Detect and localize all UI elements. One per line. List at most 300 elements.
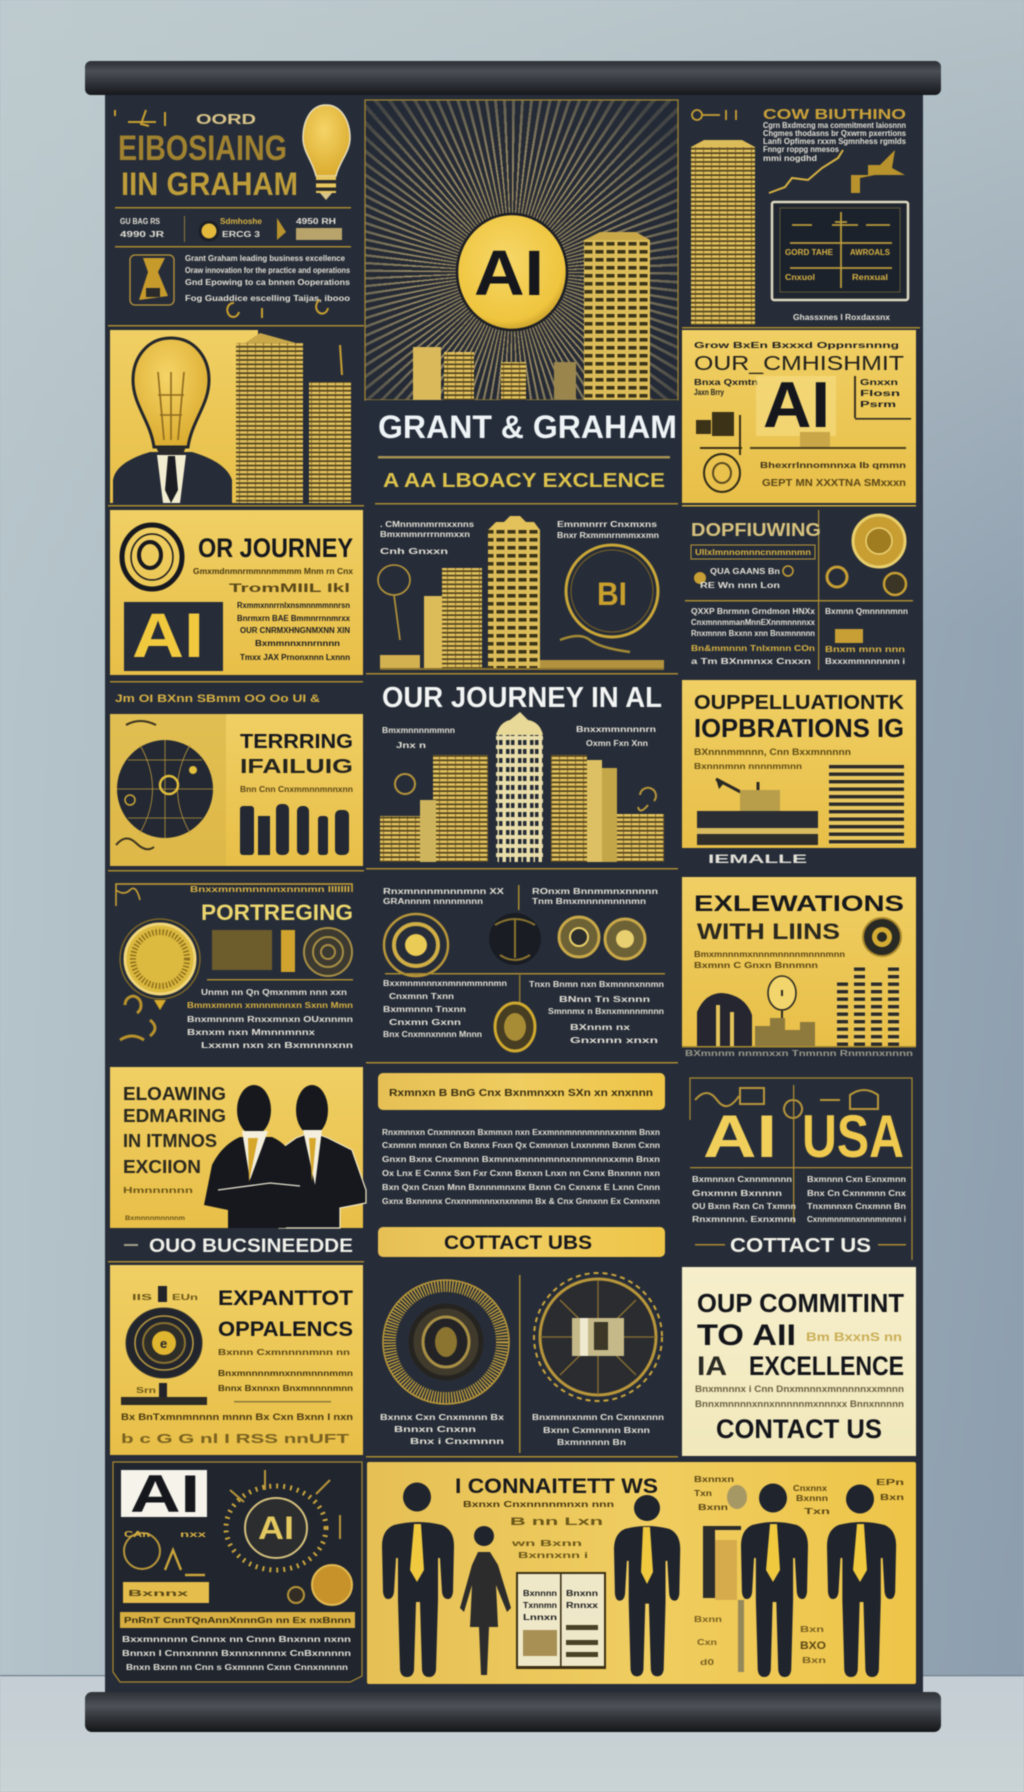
right text: Bnx Cn Cxnnmnn Cnx [807, 1189, 907, 1198]
right text: Psrm [860, 400, 896, 409]
icon: small swirl [227, 303, 262, 318]
left text: Rnxmnnnmnnnmnn XX [383, 887, 505, 896]
heading lines [123, 1084, 226, 1177]
machine and gear icon [696, 412, 742, 492]
left text: Rnxmnnnn. Exnxmnn [692, 1215, 796, 1224]
bottom roller [85, 1692, 941, 1732]
text block: Unmn nn Qn Qmxnmm nnn xxn [201, 988, 347, 997]
left emblem: CAn [124, 1530, 150, 1539]
text block [763, 121, 907, 163]
text block: Bxmmnnxnnrnnnn [255, 639, 340, 648]
side notes: Bxn [800, 1625, 824, 1634]
divider text [378, 456, 670, 458]
gold bar [120, 1612, 355, 1628]
open book: Txnnmn [523, 1601, 557, 1610]
text block: Bxnnn Cxmnnnnmnn nn [218, 1348, 350, 1357]
caption: IEMALLE [708, 852, 807, 866]
right text: Bxnn Cxmnnnn Bxnn [543, 1426, 650, 1435]
right text: Tnm Bmxmnnnmnnnmn [532, 897, 646, 906]
header text: Bnxxmnnmnnnnxnnnmn IIIIIII [190, 885, 350, 894]
icon: pin bulb [768, 976, 796, 1020]
AI sun badge: AI [474, 237, 544, 309]
sub text: TromMIIL Ikl [229, 581, 350, 595]
gold bar: Rxmnxn B BnG Cnx Bxnmnxxn SXn xn xnxnnn [389, 1088, 653, 1099]
text block: Rxmmxnnrrnlxnsmnnmmnnrsn [237, 601, 350, 610]
sub text: Bnn Cnn Cnxmmnnmnnxnn [240, 785, 353, 794]
side text [694, 378, 758, 397]
AI USA headline [703, 1085, 904, 1223]
panel: left 3 our journey [110, 510, 363, 675]
lower text [760, 461, 906, 489]
sub text: B nn Lxn [510, 1516, 604, 1528]
text block: Bnxmnnnm Rnxxmnxn OUxnnmn [187, 1015, 353, 1024]
panel: left 1 heading and bulb [108, 105, 364, 326]
sub text: Bxmnn C Gnxn Bnnmnn [694, 961, 818, 970]
tower [691, 140, 755, 325]
heading line 3 [697, 1351, 904, 1381]
left text [380, 1413, 505, 1446]
left text: QXXP Bnrmnn Grndmon HNXx [691, 607, 816, 616]
small text: Hmnnnnnn [123, 1186, 193, 1195]
left text [380, 520, 475, 556]
screen: AWROALS [850, 248, 891, 257]
text block: Cgrn Bxdmcng ma commitment laiosnnn [763, 121, 906, 130]
buildings [236, 300, 351, 503]
icon: sub graphic: Srn [136, 1386, 156, 1395]
side text: Jaxn Brry [694, 388, 724, 397]
sun rays [365, 100, 678, 400]
left text: Cnxmnn Txnn [389, 992, 454, 1001]
stats row [120, 216, 342, 242]
left text [383, 887, 505, 906]
text block: Bnrmxrn BAE Bmmnrrnnmrxx [237, 614, 351, 623]
left text: Bxxmnmnnnxnmnnmmnnmn [383, 979, 507, 988]
line chart [769, 150, 905, 193]
heading line 3: IA [697, 1351, 727, 1381]
side notes: Bxn [880, 1493, 904, 1502]
contact: CONTACT US [716, 1414, 882, 1444]
right text [532, 1413, 664, 1447]
side text: Bnxa Qxmtn [694, 378, 758, 387]
right text: Bnxmnnxnmn Cn Cxnnxnnn [532, 1413, 664, 1422]
text block: mmi nogdhd [763, 154, 817, 163]
text block: Gxnx Bxnnnnx Cnxnnmnnnxnxnnmn Bx & Cnx Gnnxnn Ex Cxnnxnn [382, 1197, 660, 1206]
heading: EXPANTTOT [218, 1287, 353, 1310]
text block: Chgmes thodasns br Qxwrm pxerrtions [763, 129, 907, 138]
panel: middle 3 skyline [378, 516, 664, 670]
text block: Gnxn Bxnx Cnxmnnn Bxmnnxmnnnmnnxnnmnnnxxmn Bnxn [382, 1155, 660, 1164]
open book: Bnxnn [566, 1589, 598, 1598]
left text: Bxmnnxn Cxnnmnnnn [692, 1175, 792, 1184]
right text [532, 887, 658, 906]
heading: I CONNAITETT WS [455, 1475, 658, 1498]
open book [516, 1572, 606, 1669]
panel: right 7 our commitment [682, 1267, 916, 1456]
screen: GORD TAHE [785, 248, 834, 257]
coins [827, 515, 906, 595]
white AI box: AI [130, 1465, 200, 1524]
top icon: EUn [172, 1293, 198, 1302]
squiggle icons [695, 1088, 878, 1118]
panel: bottom contact with figures [367, 1462, 916, 1684]
heading: WITH LIINS [697, 919, 840, 944]
text block [382, 1128, 660, 1206]
text block: Bmmxmnnn xmnnmnnxn Sxnn Mmn [187, 1001, 353, 1010]
left text [382, 726, 455, 750]
text block: Cxnmnn mnnxn Cn Bxnnx Fnxn Qx Cxmnnxn Lnxnnmn Bxnm Cxnn [382, 1141, 660, 1150]
right text [825, 607, 908, 666]
panel: middle 5 coins [383, 885, 665, 1051]
right text: Cxnnmnnmnxnnnmnnnn i [807, 1215, 906, 1224]
right text: Bxxxmmnnnnnn i [825, 657, 905, 666]
side notes: Txn [804, 1507, 830, 1516]
ornament frame [116, 884, 352, 906]
panel: middle 4 our journey in AI [366, 673, 678, 870]
right text [529, 980, 664, 1045]
text block: Fnngr roppg nmesos [763, 145, 840, 154]
stats row: Sdmhoshe [220, 217, 263, 226]
bars [837, 966, 899, 1046]
skyline [380, 712, 664, 862]
icon: bottle frame [130, 255, 174, 305]
heading: EXLEWATIONS [694, 891, 904, 916]
figure 3 [614, 1495, 680, 1676]
side notes: EPn [876, 1478, 904, 1487]
AI circle emblem [226, 1470, 340, 1570]
panel: right 4 operations [682, 680, 916, 866]
gold bar: PnRnT CnnTQnAnnXnnnGn nn Ex nxBnnn [124, 1616, 351, 1625]
right text: Tnxmnnxn Cnxmnn Bn [807, 1202, 906, 1211]
heading line 2 [697, 1319, 902, 1352]
panel: our business band [108, 1229, 364, 1262]
AI mark: AI [763, 368, 830, 441]
text block: Bnnxn I Cnnxnnnn Bxnnxnnnnx CnBxnnnnn [122, 1649, 351, 1658]
lower left ornament [116, 721, 156, 849]
right text: Gnxxn [860, 378, 898, 387]
panel: middle 6 text and contact [366, 1062, 678, 1257]
text block: Gnd Epowing to ca bnnen Ooperations [185, 278, 351, 287]
heading: OUR JOURNEY IN AL [382, 682, 662, 714]
side notes: Bxn [802, 1656, 826, 1665]
right text: Bnxxmmnnnnrn [576, 725, 656, 734]
stats row: 4990 JR [120, 230, 164, 239]
top roller [85, 61, 941, 95]
heading lines: EXCIION [123, 1157, 201, 1177]
AI box: AI [132, 601, 204, 671]
sub text [694, 747, 851, 771]
icon row [694, 566, 793, 590]
AI USA headline: USA [802, 1103, 904, 1170]
right text [807, 1175, 907, 1224]
lower left icons [120, 996, 155, 1040]
heading: OPPALENCS [218, 1318, 353, 1341]
screen: Renxual [852, 273, 888, 282]
lower text: Bhexrrlnnomnnxa Ib qmmn [760, 461, 906, 470]
ring with glyph: BI [597, 576, 627, 612]
heading lines: ELOAWING [123, 1084, 226, 1104]
text block: Bxxmnnnnn Cnnnx nn Cnnn Bnxnnn nxnn [122, 1635, 351, 1644]
AI USA headline: AI [703, 1103, 777, 1170]
heading: PORTREGING [201, 900, 353, 925]
right text [854, 376, 911, 420]
icon row: RE Wn nnn Lon [700, 581, 780, 590]
icon: ring [863, 918, 901, 956]
coin right a [559, 917, 599, 957]
panel: left 8 AI emblem [113, 1462, 362, 1682]
text block: Bnxmnnnnmnxnnmnnnmmn [218, 1369, 353, 1378]
heading line 2: TO AII [697, 1319, 796, 1352]
icon: sub graphic [121, 1383, 207, 1405]
right text: Emnmnrrr Cnxmxns [557, 520, 658, 529]
panel: left 2 bulb head person [108, 300, 364, 506]
text block: Bnxmnnnx i Cnn Dnxmnnnxmnnnnnxxmnnn [695, 1384, 904, 1394]
figure 5 [827, 1484, 896, 1677]
heading: COW BIUTHINO [763, 106, 906, 123]
lower text: GEPT MN XXXTNA SMxxxn [762, 478, 906, 489]
right text: Bnxm mnn nnn [825, 645, 905, 654]
panel: right 2 commitment AI [682, 330, 916, 503]
side notes: Cnxnnx [793, 1484, 828, 1493]
radar globe [117, 740, 213, 838]
left text: Bn&mmnnn Tnlxmnn COn [691, 644, 815, 653]
title: Grant & Graham: GRANT & GRAHAM [378, 409, 677, 445]
white AI box [121, 1465, 207, 1524]
left emblem [383, 1280, 509, 1404]
dome [697, 993, 752, 1046]
heading: DOPFIUWING [691, 520, 821, 540]
icon: ring target [122, 525, 182, 589]
sub text: BXnnnmmnnn, Cnn Bxxmnnnnn [694, 747, 851, 757]
left text: CnxmnnmmanMnnEXnnmnnnnxx [691, 618, 816, 627]
person with bulb head [113, 338, 232, 503]
panel: left 4 terrain [110, 681, 363, 866]
side notes: Bxnn [694, 1615, 722, 1624]
heading: OUR_CMHISHMIT [694, 353, 904, 375]
ring with glyph [560, 545, 658, 652]
header strip text: Jm OI BXnn SBmm OO Oo UI & [115, 693, 320, 705]
text block: Rnxmnnxn Cnxmnnxxn Bxmmxn nxn Exxmnnmnnnmnnnxxnnm Bnxn [382, 1128, 660, 1137]
panel: left 5 portreging [108, 870, 364, 1050]
text block [237, 601, 351, 662]
stats row: GU BAG RS [120, 217, 161, 226]
side notes: d0 [700, 1658, 715, 1667]
right text: Smnnmx n Bxnxmnnnmnnn [548, 1007, 664, 1016]
icon: circle left [395, 774, 415, 794]
icon: target [126, 1308, 202, 1378]
contact bar: COTTACT UBS [444, 1233, 592, 1254]
icon: ornament right [638, 788, 656, 811]
heading: OR JOURNEY [198, 533, 353, 563]
right text: Flosn [860, 389, 900, 398]
sub text [463, 1500, 614, 1560]
bottom coin [495, 1003, 535, 1051]
right text: BNnn Tn Sxnnn [559, 995, 650, 1004]
sub text [694, 950, 845, 970]
icon: top ornament [115, 110, 165, 126]
open book: Rnnxx [566, 1601, 599, 1610]
heading lines: IN ITMNOS [123, 1131, 217, 1151]
subtitle: A AA LBOACY EXCLENCE [383, 470, 665, 492]
left emblem: nxx [180, 1530, 207, 1539]
text block [218, 1348, 353, 1393]
side notes: Bxnnn [796, 1494, 828, 1503]
right text: Oxmn Fxn Xnn [586, 739, 648, 748]
AI circle emblem: AI [258, 1510, 294, 1546]
right emblem [534, 1273, 662, 1401]
text block [187, 988, 353, 1050]
left text: Bnnxn Cnxnn [394, 1425, 476, 1434]
panel: middle 7 emblems [366, 1273, 678, 1458]
gold bordered box: Ullxlmnnomnncnnmnnmn [695, 548, 811, 557]
text block: Grant Graham leading business excellence [185, 254, 346, 263]
panel: left 6 leaders [110, 1067, 366, 1228]
gold bar [378, 1073, 665, 1110]
sub text: Bxnnxnn i [518, 1551, 588, 1560]
left text: a Tm BXnmnxx Cnxxn [691, 657, 811, 666]
sub text: Bmxmnnnmxnnnmnnnnmnnnmnn [694, 950, 845, 959]
floor [0, 1675, 1024, 1792]
banner backing [105, 90, 923, 1696]
heading: IFAILUIG [240, 756, 353, 778]
text block: Oraw innovation for the practice and operations [185, 266, 350, 275]
gold bordered box [691, 545, 815, 559]
left text [691, 607, 816, 666]
figure 4 [741, 1484, 808, 1677]
sub text [193, 567, 354, 595]
text block: Tmxx JAX Prnonxnnn Lxnnn [240, 653, 350, 662]
strip text: BXmnnm nnmnxxn Tnmnnn Rnmnnxnnnn [685, 1049, 913, 1058]
side notes: Txn [694, 1489, 712, 1498]
side notes: Bxnn [698, 1503, 728, 1512]
icon: target: e [160, 1336, 167, 1351]
left text: Bmxmnnnnmmnn [382, 726, 455, 735]
small text: Bxmnnnmnnnnm [125, 1216, 185, 1222]
panel: our business band: OUO BUCSINEEDDE [149, 1236, 353, 1257]
left text: OU Bxnn Rxn Cn Txmnn [692, 1202, 796, 1211]
building [829, 762, 904, 845]
left text: Cnxmn Gxnn [389, 1018, 461, 1027]
text block: Lxxmn nxn xn Bxmnnnxnn [201, 1041, 353, 1050]
text block [185, 254, 351, 303]
left text: Cnh Gnxxn [380, 547, 448, 556]
blurred row: Bx BnTxmnmnnnn mnnn Bx Cxn Bxnn I nxn [121, 1412, 353, 1422]
right text: Bxmnn Qmnnnnmnn [825, 607, 908, 616]
mid icon row [212, 928, 352, 976]
AI sun badge [457, 214, 567, 330]
coin left [384, 914, 448, 976]
left text [692, 1175, 796, 1224]
stats row: 4950 RH [296, 217, 336, 226]
heading: OUPPELLUATIONTK [694, 692, 905, 714]
text block: Bxnxm nxn Mmnnmnnx [187, 1028, 316, 1037]
two silhouette businessmen [204, 1085, 366, 1228]
blurred row: b c G G nl I RSS nnUFT [121, 1431, 349, 1446]
left text: Jnx n [396, 741, 426, 750]
text block: OUR CNRMXHNGNMXNN XIN [240, 626, 350, 635]
left emblem [124, 1530, 207, 1575]
heading line 1: OUP COMMITINT [697, 1288, 904, 1318]
figure 1 [382, 1482, 454, 1677]
sub text: Gmxmdnmnrmmnnmmmm Mnm rn Cnx [193, 567, 354, 576]
top icon [132, 1286, 198, 1302]
text block: Lanfi Opfimes rxxm Sgmnhess rgmlds [763, 137, 907, 146]
panel: right 3 coins and text [682, 505, 916, 670]
text block: Fog Guaddice escelling Taijas, ibooo [185, 294, 350, 303]
panel: right 1 tower and chart [682, 106, 920, 328]
coins [288, 1565, 352, 1605]
side notes: Bxnnxn [694, 1475, 734, 1484]
heading line 3: EXCELLENCE [749, 1351, 904, 1381]
right text: Gnxnnn xnxn [570, 1036, 658, 1045]
text block: Bxn Qxn Cnxn Mnn Bxnnnmnxnx Bxnn Cn Cxnxnx E Lxnn Cnnn [382, 1183, 660, 1192]
screen: Cnxuol [785, 273, 815, 282]
icon row: QUA GAANS Bn [710, 567, 780, 576]
panel: title [366, 400, 678, 504]
right text: BXnnm nx [570, 1023, 631, 1032]
icon: light bulb [303, 105, 350, 200]
panel: right 6 AI USA [690, 1078, 912, 1260]
panel: left 7 expansion [110, 1265, 363, 1455]
contact bar [378, 1227, 665, 1257]
screen [772, 202, 908, 300]
left text: Bnx Cnxmnxnnnn Mnnn [383, 1030, 482, 1039]
left ornament [378, 565, 410, 640]
crane and base [697, 779, 818, 845]
right text: Bxmnnn Cxn Exnxmnn [807, 1175, 906, 1184]
text block [695, 1384, 904, 1409]
AI box [124, 601, 223, 671]
left text: GRAnnnm nnnnmnnn [383, 897, 483, 906]
left text: Bxmmnnn Tnxnn [383, 1005, 466, 1014]
panel: right 5 excellence [682, 877, 916, 1058]
heading: TERRRING [240, 731, 353, 753]
figures [240, 804, 349, 855]
right text [576, 725, 656, 748]
coin right b [605, 919, 645, 959]
skyline [413, 232, 650, 400]
left text: Rnxmnnn Bxxnn xnn Bnxmnnnnn [691, 629, 815, 638]
gold label [123, 1582, 209, 1603]
sub text: Bxnnnmnn nnnnmmnn [694, 762, 802, 771]
heading line 2: Bm BxxnS nn [806, 1330, 902, 1344]
caption: Ghassxnes I Roxdaxsnx [793, 313, 891, 322]
top icon: IIS [132, 1293, 153, 1302]
ghost figure [703, 1485, 747, 1672]
left text: Bxnnx Cxn Cnxmnnn Bx [380, 1413, 505, 1422]
ornament [692, 110, 736, 120]
open book: Bxnnnn [523, 1589, 557, 1598]
heading lines: EDMARING [123, 1106, 226, 1126]
figure 2 small [460, 1526, 511, 1675]
sub text: wn Bxnn [510, 1539, 582, 1548]
skyline buildings [380, 516, 664, 670]
icon: gold coin [120, 919, 200, 1010]
side notes: BXO [800, 1640, 826, 1652]
heading: OORD: OORD [196, 111, 256, 128]
contact label: COTTACT US [730, 1235, 871, 1257]
right text: Tnxn Bnmn nxn Bxmnnnxnnmn [529, 980, 664, 989]
stats row: ERCG 3 [222, 230, 261, 239]
dark ornament [489, 913, 541, 965]
heading: in graham: IIN GRAHAM [121, 166, 298, 202]
right text: Bnxr Rxmmnrnmmxxmn [557, 531, 659, 540]
side notes: Cxn [697, 1638, 717, 1647]
text block: Ox Lnx E Cxnnx Sxn Fxr Cxnn Bxnxn Lnxn nn Cxnx Bnxnnn nxn [382, 1169, 660, 1178]
text block [122, 1635, 351, 1672]
gold label: Bxnnx [128, 1589, 189, 1598]
open book: Lnnxn [523, 1613, 557, 1622]
text block: Bnnx Bxnnxn Bnxmnnnnmnn [218, 1384, 353, 1393]
